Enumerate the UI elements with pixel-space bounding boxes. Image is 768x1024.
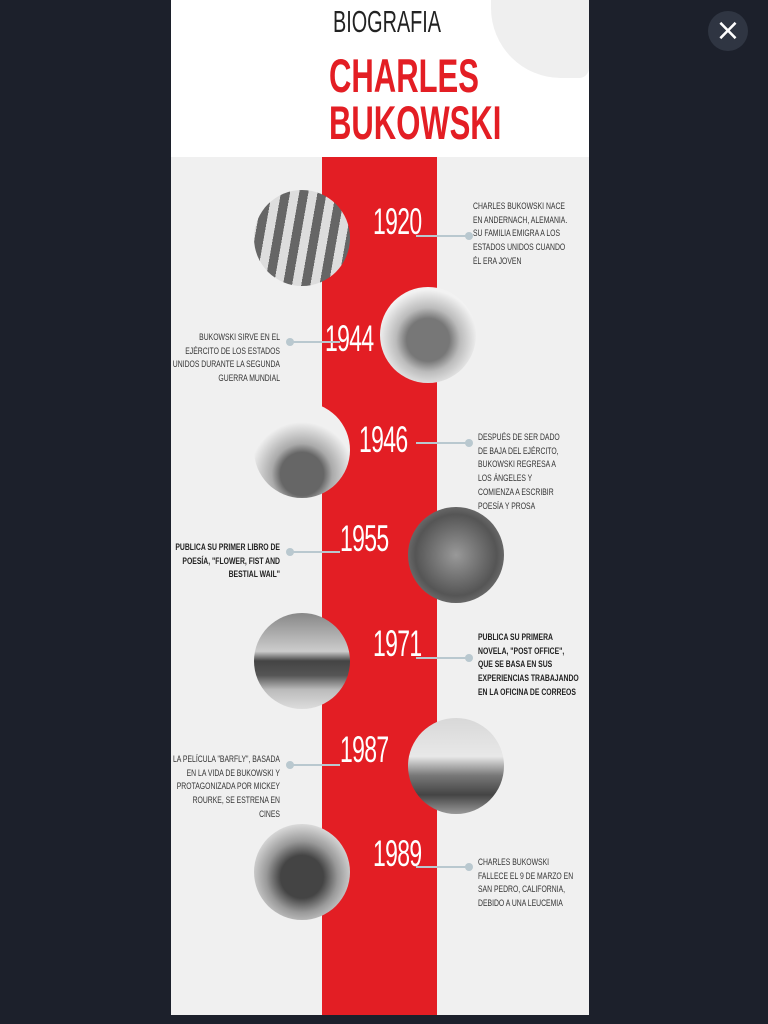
year 1946: 1946	[359, 419, 408, 460]
text 1946: DESPUÉS DE SER DADO DE BAJA DEL EJÉRCITO, BUKOWSKI REGRESA A LOS ÁNGELES Y COMIENZA A ESCRIBIR POESÍA Y PROSA	[478, 432, 560, 512]
year 1989: 1989	[373, 833, 422, 874]
title	[329, 49, 501, 149]
title: CHARLES	[329, 49, 479, 102]
year 1944: 1944	[325, 318, 374, 359]
header	[171, 0, 589, 157]
circle 1955	[408, 507, 504, 603]
red stripe	[322, 157, 437, 1015]
year 1971: 1971	[373, 623, 422, 664]
circle 1920	[254, 190, 350, 286]
year 1955: 1955	[340, 518, 389, 559]
text 1971: PUBLICA SU PRIMERA NOVELA, "POST OFFICE", QUE SE BASA EN SUS EXPERIENCIAS TRABAJANDO EN LA OFICINA DE CORREOS	[478, 632, 579, 698]
circle 1971	[254, 613, 350, 709]
year 1987: 1987	[340, 729, 389, 770]
title: BUKOWSKI	[329, 96, 501, 149]
close button	[708, 11, 748, 51]
decorative splash	[491, 0, 589, 78]
text 1989: CHARLES BUKOWSKI FALLECE EL 9 DE MARZO EN SAN PEDRO, CALIFORNIA, DEBIDO A UNA LEUCEMIA	[478, 857, 573, 909]
circle 1946	[254, 402, 350, 498]
circle 1987	[408, 718, 504, 814]
text 1944: BUKOWSKI SIRVE EN EL EJÉRCITO DE LOS ESTADOS UNIDOS DURANTE LA SEGUNDA GUERRA MUNDIAL	[173, 332, 280, 384]
year 1920: 1920	[373, 201, 422, 242]
text 1987: LA PELÍCULA "BARFLY", BASADA EN LA VIDA DE BUKOWSKI Y PROTAGONIZADA POR MICKEY ROURKE, SE ESTRENA EN CINES	[173, 754, 280, 820]
text 1920: CHARLES BUKOWSKI NACE EN ANDERNACH, ALEMANIA. SU FAMILIA EMIGRA A LOS ESTADOS UNIDOS CUANDO ÉL ERA JOVEN	[473, 201, 567, 267]
page panel	[171, 0, 589, 1015]
circle 1944	[380, 287, 476, 383]
close button: ×	[715, 13, 741, 48]
circle 1989	[254, 824, 350, 920]
text 1955: PUBLICA SU PRIMER LIBRO DE POESÍA, "FLOWER, FIST AND BESTIAL WAIL"	[175, 542, 280, 580]
subtitle: BIOGRAFIA	[333, 4, 441, 39]
